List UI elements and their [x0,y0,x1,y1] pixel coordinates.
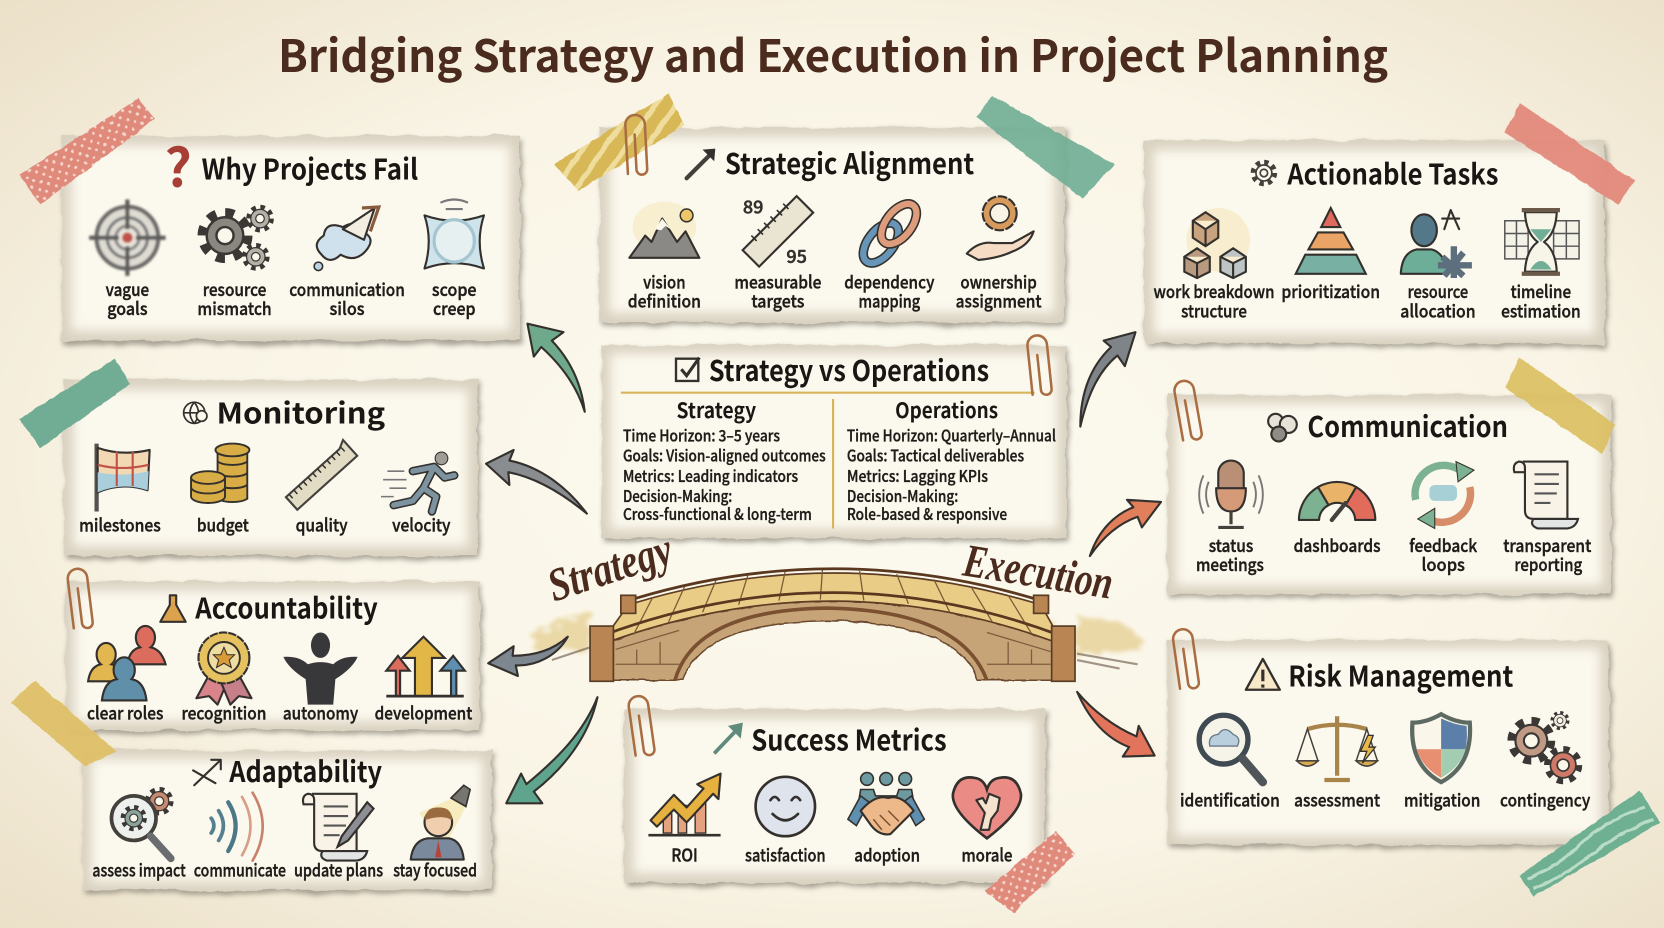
caption: execution: Execution [959,535,1117,610]
heading icon: warning triangle [1246,659,1280,690]
label: ownership assignment: ownership [960,270,1037,295]
column lines: Cross-functional & long-term [623,502,812,525]
paper sheet [1144,140,1607,347]
arrow: to adaptability [506,697,597,803]
paper sheet [62,136,522,345]
icon: contingency gears [1512,713,1578,780]
label: resource allocation [1400,279,1476,323]
label: scope creep: creep [433,296,475,321]
label: transparent reporting: reporting [1514,552,1582,577]
paperclip: accountability [67,568,93,630]
panel: risk management [1167,640,1611,848]
heading: Adaptability [228,750,383,791]
icon: coins [191,444,249,503]
paper sheet [66,582,482,733]
arch band [675,608,987,680]
label: communication silos: communication [289,277,405,302]
label: adoption: adoption [854,843,920,868]
icon: ROI chart [648,774,721,835]
label: vague goals: goals [107,296,148,321]
label: resource mismatch: mismatch [197,296,272,321]
label: budget: budget [197,513,249,538]
column lines: Time Horizon: Quarterly–Annual [847,423,1056,446]
ground wash [529,594,1144,654]
column lines [623,423,826,525]
icon: ruler [283,440,357,510]
label: timeline estimation: estimation [1501,298,1581,323]
label: feedback loops: loops [1421,552,1465,577]
label: vision definition: vision [643,270,686,295]
panel: strategic alignment [600,127,1067,326]
column lines: Decision-Making: [623,484,732,507]
tape: red top right [1505,103,1634,205]
icon: heart with hand [953,777,1021,838]
heading: Why Projects Fail [202,147,418,188]
label: dashboards: dashboards [1294,533,1381,558]
icon: scroll and pen [303,794,374,861]
icon: ruler and numbers: 89 [743,193,763,219]
panel: accountability [66,582,482,733]
panel: strategy vs operations [602,345,1069,541]
icon: scope creep bag [425,200,484,268]
panel: monitoring [64,380,480,559]
railings [600,569,1063,637]
divider: gold rule [621,393,1035,528]
icon: flag [97,444,150,511]
icon: handshake [848,773,924,834]
icon: feedback loop [1415,462,1474,528]
label: work breakdown structure: structure [1181,298,1247,323]
label: measurable targets: targets [751,289,804,314]
column lines: Metrics: Leading indicators [623,464,798,487]
label: feedback loops: feedback [1409,533,1477,558]
icon: magnifier with cloud [1199,715,1263,782]
arrow: to risk management [1077,692,1155,757]
label: resource mismatch [197,277,272,321]
heading: Communication [1307,405,1508,446]
column lines: Time Horizon: 3–5 years [623,423,780,446]
panel: communication [1167,395,1613,597]
icon: gears [203,208,271,268]
heading: Success Metrics [751,718,947,759]
label: scope creep: scope [432,277,477,302]
bridge posts [590,595,1075,681]
label: communicate: communicate [194,858,286,883]
tape: yellow right [1505,358,1615,454]
label: dependency mapping: dependency [844,270,935,295]
label: ownership assignment [956,270,1042,314]
icon: sound waves [211,793,263,861]
icon: medal [196,632,252,705]
label: ownership assignment: assignment [956,289,1042,314]
heading: Risk Management [1288,655,1513,696]
label: dependency mapping: mapping [859,289,920,314]
paperclip: strategy vs operations [1026,334,1052,396]
label: development: development [375,700,472,725]
label: assess impact: assess impact [92,858,186,883]
icon: ruler and numbers: 95 [786,243,807,269]
label: status meetings: meetings [1196,552,1264,577]
label: clear roles: clear roles [87,700,163,725]
heading: Strategy vs Operations [709,349,989,390]
icon: growth arrows [386,637,465,696]
heading icon: gear [1253,162,1275,184]
column: strategy [623,394,826,525]
heading icon: globe gear [184,402,207,423]
paper sheet [602,345,1069,541]
icon: gauge [1299,482,1375,520]
deck planks [600,573,1063,645]
label: measurable targets [734,270,821,314]
icon: hand holding badge [967,196,1034,260]
label: satisfaction: satisfaction [745,843,826,868]
paperclip: success metrics [627,695,655,757]
label: assessment: assessment [1294,787,1380,812]
arrow: to monitoring [486,450,587,514]
icon: person with tools [1401,210,1472,278]
paperclip: risk management [1172,628,1200,690]
icon: cloud and arrow [314,207,379,271]
icon: shield [1412,714,1470,782]
tape: green left [19,359,131,448]
column heading: Strategy [677,394,756,425]
label: status meetings: status [1209,533,1253,558]
icon: person in spotlight [411,785,470,860]
icon: hourglass [1505,210,1579,274]
label: resource allocation: allocation [1400,298,1476,323]
ground scratches [552,647,1138,669]
label: resource mismatch: resource [203,277,266,302]
tape: yellow striped top centre [554,93,684,191]
icon: blurred target [89,200,166,276]
icon: chain link [856,198,923,269]
caption: strategy: Strategy [541,523,679,612]
label: identification: identification [1180,787,1280,812]
icon: smiley [756,777,815,836]
label: communication silos: silos [330,296,365,321]
label: ROI: ROI [671,843,698,868]
column lines: Goals: Vision-aligned outcomes [623,444,826,467]
tape: yellow lower left [11,681,117,766]
heading: Actionable Tasks [1286,153,1498,194]
paper sheet [1167,640,1611,848]
column lines: Metrics: Lagging KPIs [847,464,988,487]
heading icon: arrow wrench [193,760,221,785]
arrow: to why projects fail [527,324,585,412]
label: dependency mapping [844,270,935,314]
label: milestones: milestones [79,513,161,538]
label: vague goals: vague [106,277,149,302]
panel: success metrics [624,709,1047,886]
brick lines [616,630,1051,664]
stone wall and arch [600,601,1063,680]
label: timeline estimation: timeline [1511,279,1571,304]
label: morale: morale [961,843,1012,868]
icon: pyramid [1296,208,1366,274]
label: resource allocation: resource [1408,279,1468,304]
label: communication silos [289,277,405,321]
icon: microphone [1199,461,1263,527]
label: work breakdown structure: work breakdown [1154,279,1275,304]
label: timeline estimation [1501,279,1581,323]
column lines: Role-based & responsive [847,502,1007,525]
column heading: Operations [895,394,998,425]
paperclip: communication [1173,379,1203,442]
label: prioritization: prioritization [1281,279,1380,304]
icon: magnifier gear [111,790,171,858]
heading: Monitoring [217,391,385,432]
title: Bridging Strategy and Execution in Project Planning [278,20,1388,85]
label: transparent reporting: transparent [1503,533,1591,558]
heading: Accountability [194,587,378,628]
paper sheet [64,380,480,559]
paper sheet [83,750,493,894]
label: transparent reporting [1503,533,1591,577]
paper sheet [624,709,1047,886]
tape: green top centre-right [976,96,1114,198]
arrow: to accountability [488,637,568,676]
label: stay focused: stay focused [393,858,477,883]
paper sheet [1167,395,1613,597]
panel: actionable tasks [1144,140,1607,347]
tape: red dotted top left [19,99,155,205]
panel: adaptability [83,750,493,894]
panel: why projects fail [62,126,522,345]
tape: green wavy bottom right [1520,791,1661,897]
icon: mountain and sun [629,202,699,258]
label: vague goals [106,277,149,321]
arrow: to communication [1090,500,1161,556]
arrow: to actionable tasks [1080,332,1135,427]
plank lines [634,570,1032,635]
column: operations [847,394,1056,525]
column lines [847,423,1056,525]
label: contingency: contingency [1500,787,1591,812]
label: velocity: velocity [392,513,451,538]
paperclip: strategic alignment [625,114,647,175]
label: vision definition [628,270,701,314]
label: vision definition: definition [628,289,701,314]
column lines: Goals: Tactical deliverables [847,444,1024,467]
icon: team [88,626,166,700]
icon: autonomy figure [283,632,358,705]
label: feedback loops [1409,533,1477,577]
label: status meetings [1196,533,1264,577]
label: work breakdown structure [1154,279,1275,323]
heading icon: up arrow [714,723,743,753]
bridge illustration [529,523,1144,681]
heading icon: pickaxe arrow [687,149,715,178]
heading icon: chat cluster [1268,414,1297,441]
heading: Strategic Alignment [725,142,974,183]
column lines: Decision-Making: [847,484,958,507]
label: scope creep [432,277,477,321]
icon: ruler and numbers [743,193,813,269]
heading icon: question mark: ? [165,126,192,203]
label: recognition: recognition [181,700,266,725]
icon: scales [1297,716,1377,780]
label: quality: quality [296,513,348,538]
tape: red dotted bottom centre [985,831,1075,913]
icon: cubes [1184,208,1250,278]
heading icon: trophy flask [160,595,186,622]
paper sheet [600,127,1067,326]
icon: transparent report scroll [1514,462,1578,528]
label: mitigation: mitigation [1404,787,1480,812]
label: autonomy: autonomy [283,700,359,725]
label: measurable targets: measurable [734,270,821,295]
label: update plans: update plans [294,858,383,883]
icon: runner [381,452,454,511]
heading icon: checkbox [676,358,699,381]
